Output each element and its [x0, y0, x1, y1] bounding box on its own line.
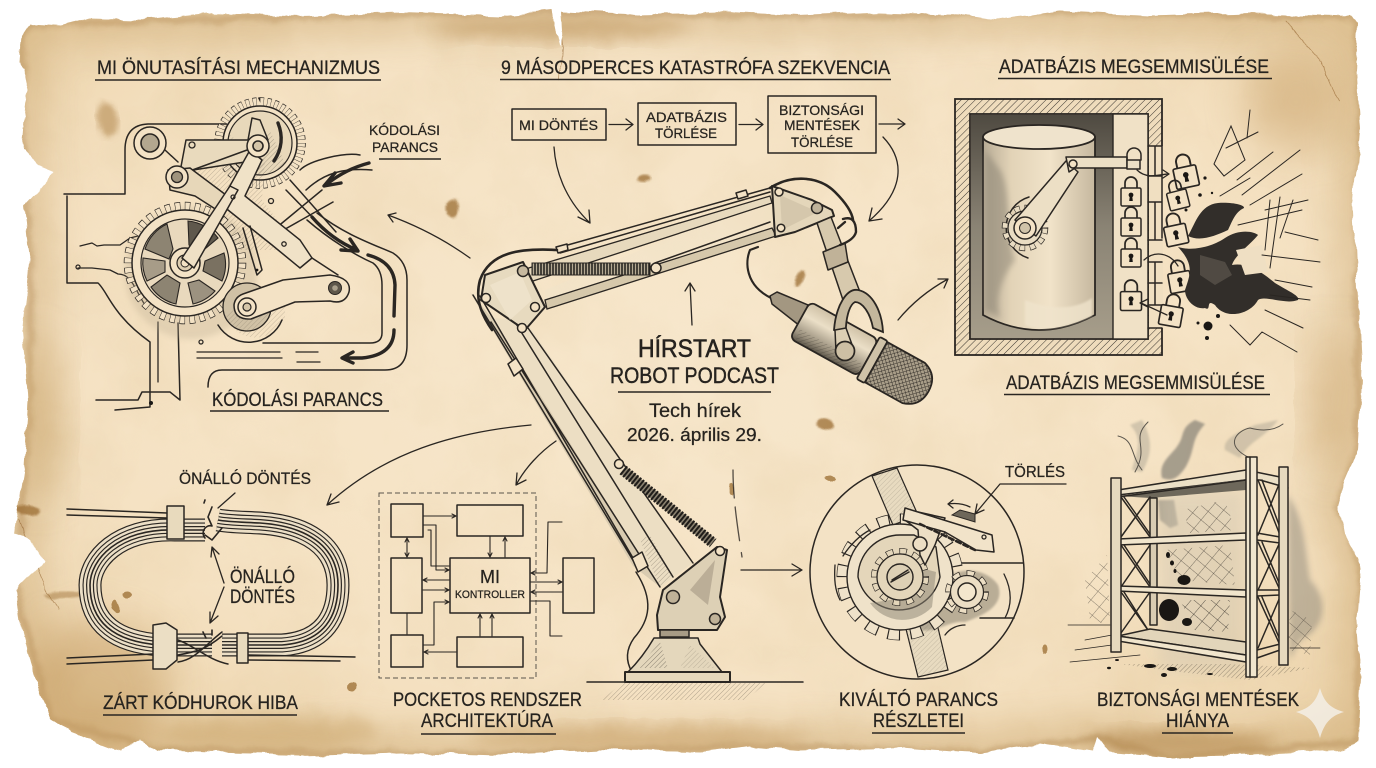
panel: AI self-instruction mechanism	[64, 58, 441, 411]
label: coding command small: PARANCS	[372, 139, 438, 155]
caption: database destruction: ADATBÁZIS MEGSEMMISÜLÉSE	[1006, 373, 1265, 394]
title block	[610, 334, 779, 445]
title block: Tech hírek	[649, 401, 742, 422]
cable break	[203, 500, 222, 638]
database cylinder	[983, 125, 1095, 330]
flow box: AI decision: MI DÖNTÉS	[519, 116, 598, 133]
base bracket	[587, 546, 803, 700]
caption: trigger details	[839, 689, 998, 733]
caption: architecture: ARCHITEKTÚRA	[421, 710, 553, 732]
panel: database destruction	[955, 57, 1320, 394]
top spring	[532, 263, 661, 275]
flow box: backup deletion: TÖRLÉSE	[791, 133, 853, 150]
arrow: up to arm	[685, 283, 695, 325]
gear: top	[219, 102, 301, 184]
elbow hub	[481, 262, 545, 332]
shelving unit	[1111, 457, 1288, 677]
upper arm	[478, 188, 776, 330]
lower spring	[614, 460, 713, 543]
label: autonomous decision top: ÖNÁLLÓ DÖNTÉS	[179, 469, 311, 488]
cable clamps	[153, 506, 248, 669]
label: delete	[975, 462, 1066, 514]
panel: PocketOS system architecture	[379, 493, 594, 734]
frame pipes	[64, 124, 407, 410]
caption: missing backups: BIZTONSÁGI MENTÉSEK	[1097, 690, 1299, 711]
panel: closed code loop error	[67, 469, 355, 715]
caption: trigger details: KIVÁLTÓ PARANCS	[839, 689, 998, 711]
label: coding command small: KÓDOLÁSI	[369, 122, 440, 138]
levers and linkage	[134, 118, 349, 342]
arrow: deletion to backups	[739, 119, 763, 130]
pointer arrows	[210, 493, 295, 623]
flow box: database deletion	[638, 103, 736, 145]
AI controller box: MI	[480, 567, 500, 587]
caption: missing backups: HIÁNYA	[1166, 711, 1229, 732]
smoke and wash	[1068, 420, 1322, 680]
heading: database destruction: ADATBÁZIS MEGSEMMISÜLÉSE	[999, 57, 1269, 78]
ink burst	[1178, 110, 1320, 352]
AI controller box: KONTROLLER	[455, 589, 525, 601]
vault walls	[955, 99, 1163, 355]
flow box: database deletion: ADATBÁZIS	[646, 109, 727, 125]
caption: missing backups	[1097, 690, 1299, 733]
flow box: backup deletion: MENTÉSEK	[784, 117, 861, 133]
head plate and cable	[770, 179, 860, 300]
icon: sparkle watermark	[1296, 688, 1344, 738]
panel: 9-second disaster sequence	[500, 57, 905, 325]
label: coding command: KÓDOLÁSI PARANCS	[212, 389, 383, 411]
caption: architecture	[393, 690, 582, 734]
ink blots	[1107, 552, 1213, 677]
label: coding command small	[369, 122, 441, 159]
cable loop	[67, 500, 355, 669]
microphone	[747, 247, 940, 412]
flow arrows	[312, 163, 395, 363]
robot arm on cylinder	[1005, 148, 1141, 258]
lower arm	[470, 292, 693, 672]
gear: main spoked wheel	[125, 206, 257, 339]
arrow: out of backups	[879, 119, 905, 129]
component boxes	[391, 504, 594, 667]
padlocks flying out	[1137, 152, 1200, 328]
panel: trigger command details	[810, 462, 1066, 733]
flow box: backup deletion: BIZTONSÁGI	[779, 102, 864, 118]
pointer arrows: DÖNTÉS	[230, 587, 295, 608]
connector arrows from the microphone stand	[327, 213, 948, 576]
connection lines	[405, 514, 562, 654]
heading: sequence: 9 MÁSODPERCES KATASTRÓFA SZEKVENCIA	[501, 57, 890, 79]
arrow: decision to deletion	[609, 119, 633, 130]
caption: trigger details: RÉSZLETEI	[873, 711, 964, 732]
flow box: AI decision	[512, 109, 606, 140]
label: delete: TÖRLÉS	[1005, 462, 1065, 481]
AI controller box	[450, 558, 530, 613]
central microphone stand illustration	[470, 179, 940, 700]
caption: architecture: POCKETOS RENDSZER	[393, 690, 582, 711]
heading: mechanism: MI ÖNUTASÍTÁSI MECHANIZMUS	[97, 58, 380, 79]
panel: missing backups	[1068, 420, 1344, 738]
dashed system boundary	[379, 493, 536, 678]
arrow: curved from decision	[554, 147, 590, 223]
arrow: curved from backups	[869, 137, 898, 221]
detail circle with gears	[810, 465, 1024, 679]
title block: HÍRSTART	[638, 334, 751, 363]
padlocks in panel	[1120, 177, 1142, 310]
caption: loop error: ZÁRT KÓDHUROK HIBA	[103, 692, 298, 714]
title block: ROBOT PODCAST	[610, 363, 779, 388]
flow box: backup deletion	[768, 96, 876, 153]
flow box: database deletion: TÖRLÉSE	[655, 124, 717, 141]
pointer arrows: ÖNÁLLÓ	[230, 566, 295, 588]
title block: 2026. április 29.	[627, 425, 762, 445]
